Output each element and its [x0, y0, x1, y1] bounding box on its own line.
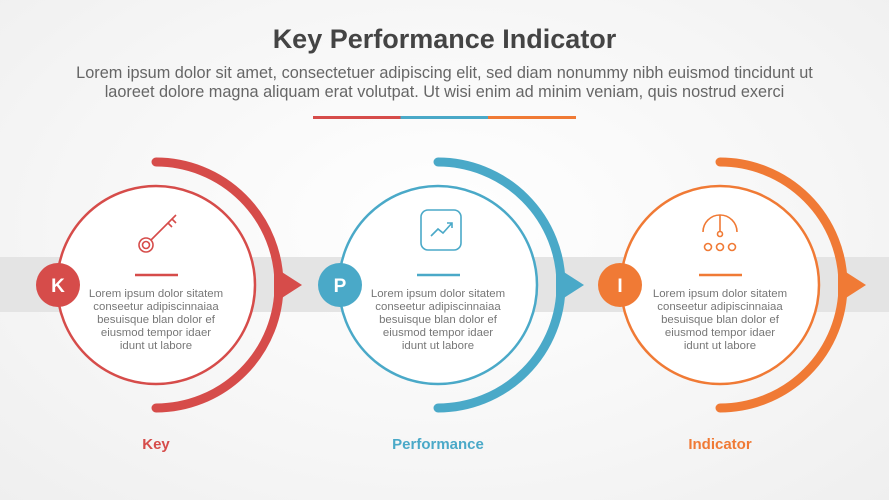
step: Performance: Lorem ipsum dolor sitatem	[371, 288, 505, 300]
step: Indicator: Lorem ipsum dolor sitatem	[653, 288, 787, 300]
step: Key	[36, 162, 302, 453]
step: Performance: besuisque blan dolor ef	[379, 314, 498, 326]
step: Key: conseetur adipiscinnaiaa	[93, 301, 219, 313]
step: Performance: Performance	[392, 436, 484, 453]
step: Key: besuisque blan dolor ef	[97, 314, 216, 326]
subtitle	[76, 64, 813, 101]
step: Key: idunt ut labore	[120, 340, 192, 352]
step: Performance	[318, 162, 584, 453]
step: Performance: idunt ut labore	[402, 340, 474, 352]
subtitle: laoreet dolore magna aliquam erat volutpat. Ut wisi enim ad minim veniam, quis nostrud exerci	[105, 83, 784, 101]
subtitle: Lorem ipsum dolor sit amet, consectetuer adipiscing elit, sed diam nonummy nibh euismod tincidunt ut	[76, 64, 813, 82]
step: Performance: conseetur adipiscinnaiaa	[375, 301, 501, 313]
step: Indicator: besuisque blan dolor ef	[661, 314, 780, 326]
step: Key: Lorem ipsum dolor sitatem	[89, 288, 223, 300]
step: Indicator: eiusmod tempor idaer	[665, 327, 775, 339]
icon: gauge	[703, 215, 737, 250]
step: Key: eiusmod tempor idaer	[101, 327, 211, 339]
divider tricolor	[313, 116, 576, 119]
step: Indicator: conseetur adipiscinnaiaa	[657, 301, 783, 313]
title: Key Performance Indicator	[273, 24, 616, 54]
step: Indicator: I	[617, 276, 623, 297]
step: Indicator: idunt ut labore	[684, 340, 756, 352]
step: Indicator: Indicator	[688, 436, 752, 453]
step: Performance: P	[334, 276, 347, 297]
icon: key	[139, 215, 176, 252]
step: Key: K	[51, 276, 65, 297]
step: Performance: eiusmod tempor idaer	[383, 327, 493, 339]
icon: chart	[421, 210, 461, 250]
step: Indicator	[598, 162, 866, 453]
step: Key: Key	[142, 436, 170, 453]
